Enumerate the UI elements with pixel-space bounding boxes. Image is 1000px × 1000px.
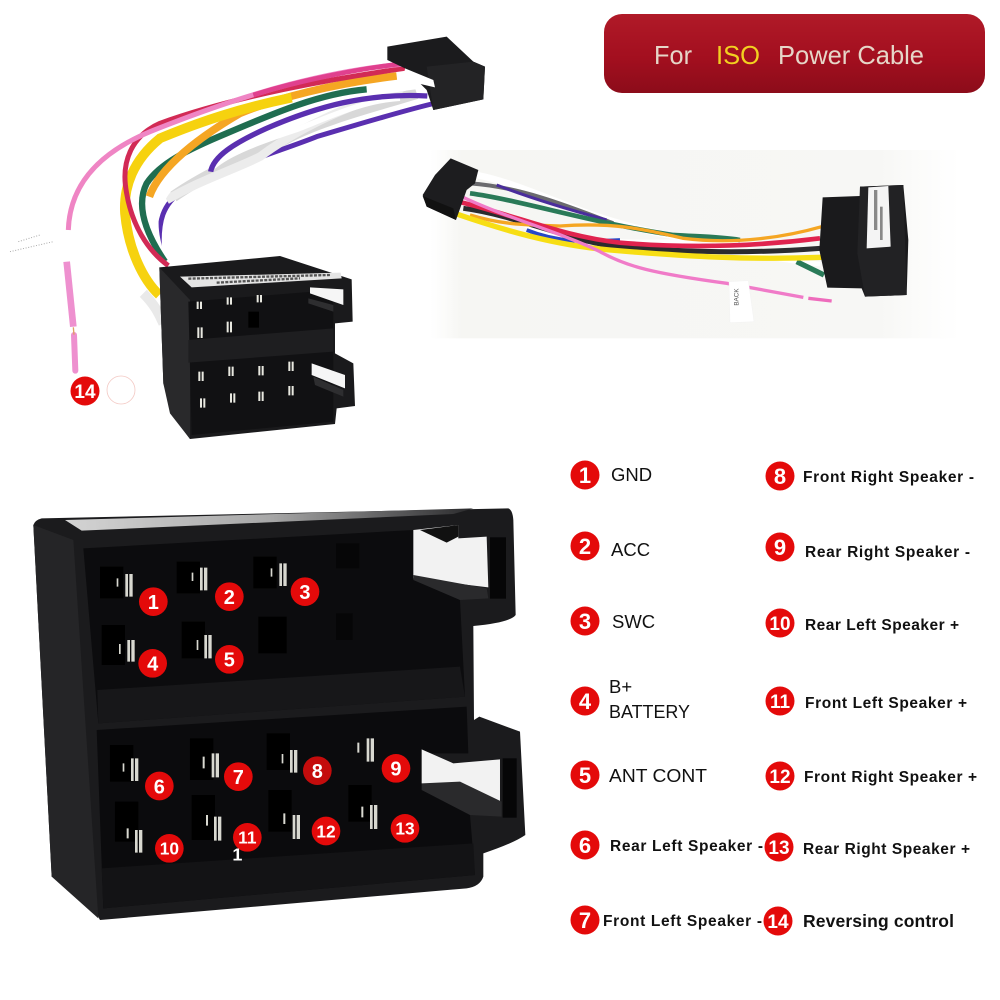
title banner: For ISO Power Cable: For xyxy=(654,40,692,70)
pin badges 1–13: 1 xyxy=(232,845,242,865)
main ISO connector xyxy=(159,256,355,439)
pin badges 1–13: 8 xyxy=(312,761,323,783)
pin badges 1–13: 2 xyxy=(224,587,235,609)
small connector xyxy=(423,158,478,220)
pin badges 1–13: 5 xyxy=(224,650,235,672)
legend item 12: 12 xyxy=(769,767,791,788)
legend item 10 xyxy=(766,608,959,638)
wires xyxy=(457,175,832,301)
BACK wire tag: BACK xyxy=(733,288,740,306)
legend: pin functions xyxy=(570,460,977,936)
title banner: For ISO Power Cable xyxy=(604,14,985,93)
legend item 13: Rear Right Speaker + xyxy=(803,841,970,858)
empty circle outline xyxy=(107,376,135,404)
legend item 5: ANT CONT xyxy=(609,765,707,786)
legend item 7: Front Left Speaker - xyxy=(603,913,762,930)
legend item 6: 6 xyxy=(579,833,591,858)
title banner: For ISO Power Cable: Power Cable xyxy=(778,40,924,70)
legend item 10: 10 xyxy=(769,614,791,635)
wires bundle xyxy=(68,63,433,323)
legend item 12 xyxy=(766,762,977,790)
legend item 4: 4 xyxy=(579,689,592,714)
badge: 14 on pink wire: 14 xyxy=(74,382,96,403)
legend item 1: GND xyxy=(611,464,652,485)
pin badges 1–13: 7 xyxy=(233,767,244,789)
legend item 2: 2 xyxy=(579,534,591,559)
legend item 1 xyxy=(570,460,652,490)
legend item 11 xyxy=(766,686,967,716)
legend item 4 xyxy=(570,676,690,722)
small connector xyxy=(387,37,485,110)
legend item 11: 11 xyxy=(770,692,790,713)
panel: large connector pin diagram xyxy=(33,508,525,920)
legend item 1: 1 xyxy=(579,463,591,488)
legend item 10: Rear Left Speaker + xyxy=(805,617,959,634)
legend item 7 xyxy=(570,906,762,934)
wire label fragment xyxy=(10,235,53,252)
pin badges 1–13: 3 xyxy=(299,582,311,604)
legend item 6 xyxy=(570,830,763,860)
legend item 12: Front Right Speaker + xyxy=(804,769,977,786)
legend item 3 xyxy=(570,606,655,636)
pin badges 1–13: 1 xyxy=(148,592,159,614)
legend item 8: Front Right Speaker - xyxy=(803,469,974,486)
pin badges 1–13: 4 xyxy=(147,654,158,676)
pin badges 1–13: 10 xyxy=(160,839,179,859)
terminals xyxy=(100,557,377,853)
pin badges 1–13: 11 xyxy=(238,828,257,848)
legend item 8: 8 xyxy=(774,464,786,489)
legend item 9: Rear Right Speaker - xyxy=(805,544,970,561)
legend item 14: 14 xyxy=(767,912,789,933)
ISO connector side xyxy=(819,185,908,297)
legend item 9 xyxy=(766,532,970,562)
terminals xyxy=(197,295,294,408)
legend item 9: 9 xyxy=(774,535,786,560)
legend item 14: Reversing control xyxy=(803,911,954,931)
pink reversing wire end xyxy=(67,262,75,371)
legend item 5: 5 xyxy=(579,763,591,788)
legend item 3: SWC xyxy=(612,611,655,632)
legend item 6: Rear Left Speaker - xyxy=(610,838,763,855)
legend item 3: 3 xyxy=(579,609,591,634)
photo: wiring harness front view xyxy=(10,37,485,439)
legend item 4: B+ xyxy=(609,676,632,697)
legend item 11: Front Left Speaker + xyxy=(805,695,967,712)
pin badges 1–13: 6 xyxy=(154,776,165,798)
pin badges 1–13: 9 xyxy=(390,759,402,781)
legend item 13 xyxy=(764,832,970,862)
photo background xyxy=(430,150,960,338)
legend item 13: 13 xyxy=(768,838,790,859)
legend item 8 xyxy=(766,462,974,490)
legend item 7: 7 xyxy=(579,908,591,933)
pin badges 1–13 xyxy=(138,577,419,865)
badge: 14 on pink wire xyxy=(70,376,100,406)
title banner: For ISO Power Cable: ISO xyxy=(716,40,760,70)
legend item 2 xyxy=(570,532,650,560)
legend item 5 xyxy=(570,760,707,790)
legend item 4: BATTERY xyxy=(609,701,690,722)
legend item 14 xyxy=(764,906,954,936)
legend item 2: ACC xyxy=(611,539,650,560)
BACK wire tag xyxy=(729,281,754,323)
pin badges 1–13: 13 xyxy=(395,819,415,839)
photo: wiring harness side view xyxy=(423,150,960,338)
pin badges 1–13: 12 xyxy=(316,821,336,841)
connector body xyxy=(33,508,525,920)
